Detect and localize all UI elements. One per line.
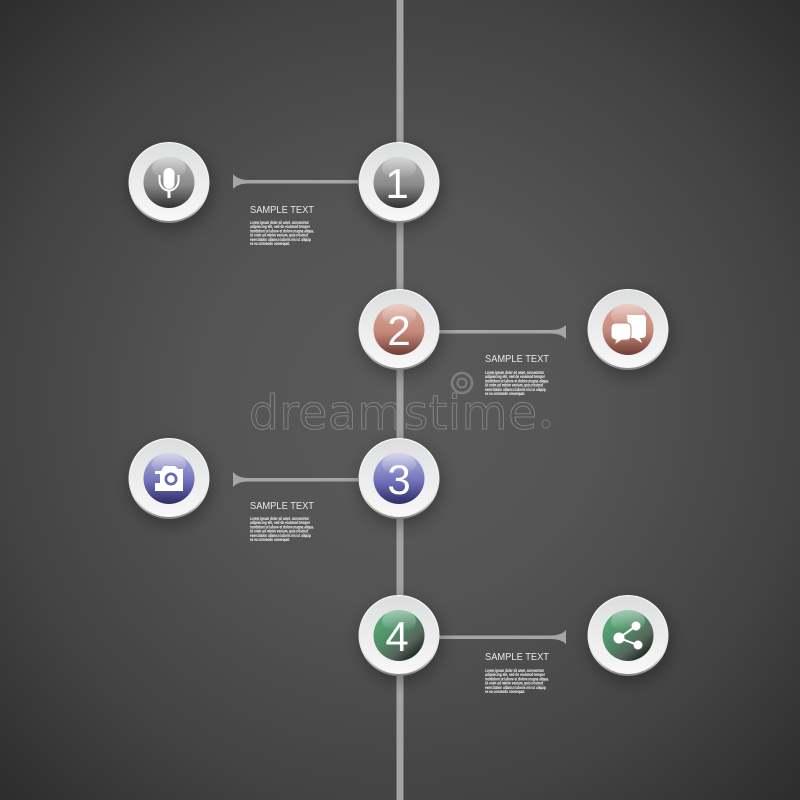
timeline vertical line (396, 0, 404, 800)
connector 4 (438, 630, 566, 644)
text block 1: incididunt ut labore et dolore magna aliqua. (250, 228, 314, 233)
text block 3: exercitation ullamco laboris nisi ut aliquip (250, 533, 311, 538)
text block 1: ex ea commodo consequat. (250, 241, 290, 246)
number node 2 (358, 289, 442, 376)
text block 4 (485, 651, 550, 694)
text block 2: incididunt ut labore et dolore magna aliqua. (485, 378, 549, 383)
number node 2: 2 (387, 307, 411, 354)
text block 1: Lorem ipsum dolor sit amet, consectetur (250, 220, 309, 225)
text block 1 (250, 204, 315, 246)
number node 3 (358, 438, 442, 525)
text block 2: adipisicing elit, sed do eiusmod tempor (485, 374, 545, 379)
text block 3: adipisicing elit, sed do eiusmod tempor (250, 520, 310, 525)
text block 1: SAMPLE TEXT (250, 204, 315, 216)
text block 4: Ut enim ad minim veniam, quis nostrud (485, 681, 543, 686)
connector 1 (233, 174, 358, 189)
number node 1: 1 (385, 160, 409, 207)
text block 2: Ut enim ad minim veniam, quis nostrud (485, 383, 543, 388)
icon node: microphone (128, 142, 212, 229)
watermark: dreamstime (249, 386, 537, 441)
connector 2 (438, 325, 566, 339)
text block 3: Lorem ipsum dolor sit amet, consectetur (250, 516, 309, 521)
text block 2: exercitation ullamco laboris nisi ut aliquip (485, 387, 546, 392)
text block 4: adipisicing elit, sed do eiusmod tempor (485, 672, 545, 677)
text block 4: SAMPLE TEXT (485, 651, 550, 663)
number node 4 (358, 595, 442, 682)
number node 3: 3 (387, 456, 411, 503)
text block 4: incididunt ut labore et dolore magna aliqua. (485, 676, 549, 681)
connector 3 (233, 472, 358, 487)
text block 2: Lorem ipsum dolor sit amet, consectetur (485, 370, 544, 375)
text block 3 (250, 500, 315, 542)
text block 4: exercitation ullamco laboris nisi ut aliquip (485, 685, 546, 690)
number node 1 (358, 142, 442, 229)
text block 4: ex ea commodo consequat. (485, 689, 525, 694)
text block 2 (485, 353, 550, 396)
number node 4: 4 (385, 613, 409, 660)
text block 4: Lorem ipsum dolor sit amet, consectetur (485, 668, 544, 673)
text block 1: adipisicing elit, sed do eiusmod tempor (250, 224, 310, 229)
text block 2: SAMPLE TEXT (485, 353, 550, 365)
icon node: camera (128, 438, 212, 525)
text block 2: ex ea commodo consequat. (485, 391, 525, 396)
text block 1: exercitation ullamco laboris nisi ut aliquip (250, 237, 311, 242)
text block 3: incididunt ut labore et dolore magna aliqua. (250, 524, 314, 529)
icon node: share (588, 595, 671, 682)
text block 3: Ut enim ad minim veniam, quis nostrud (250, 529, 308, 534)
text block 3: SAMPLE TEXT (250, 500, 315, 512)
text block 3: ex ea commodo consequat. (250, 537, 290, 542)
icon node: speech bubbles (588, 289, 671, 376)
text block 1: Ut enim ad minim veniam, quis nostrud (250, 233, 308, 238)
